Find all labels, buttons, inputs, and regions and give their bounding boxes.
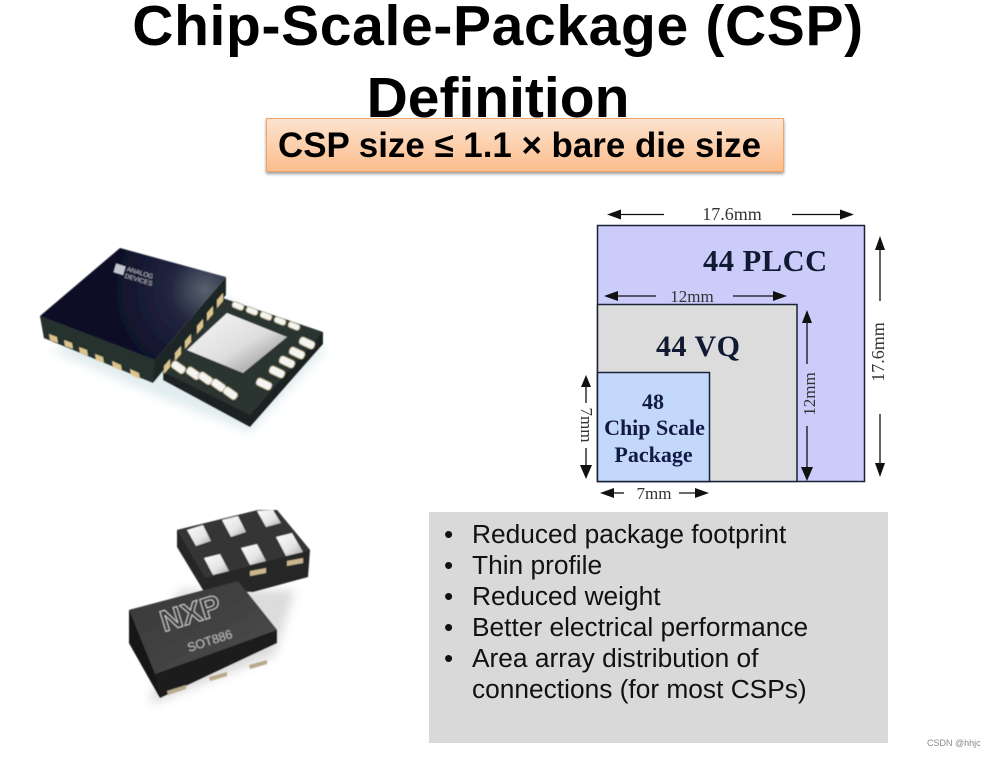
panel: CSP benefits list: Better electrical performance xyxy=(472,612,808,642)
panel: CSP benefits list: Reduced package footprint xyxy=(472,519,786,549)
panel: CSP benefits list xyxy=(429,512,888,743)
callout: CSP size definition: CSP size ≤ 1.1 × bare die size xyxy=(278,126,761,165)
callout: CSP size definition xyxy=(266,118,784,172)
icon: Analog Devices QFN package photo xyxy=(40,248,325,432)
panel: CSP benefits list: • xyxy=(444,612,453,642)
dimension: right 17.6mm: 17.6mm xyxy=(868,322,888,382)
panel: 48 Chip Scale Package: Package xyxy=(614,442,693,467)
panel: 44 PLCC xyxy=(598,226,864,482)
dimension: CSP height 7mm xyxy=(577,375,596,479)
dimension: VQ height 12mm: 12mm xyxy=(800,372,819,416)
lower package with marking: SOT886 xyxy=(186,627,234,655)
title: Definition xyxy=(367,66,629,130)
dimension: CSP width 7mm: 7mm xyxy=(637,484,671,503)
lower package, pad side up xyxy=(163,297,323,427)
panel: 44 VQ: 44 VQ xyxy=(656,330,740,363)
icon: NXP SOT886 package photo xyxy=(129,510,310,705)
panel: CSP benefits list: Thin profile xyxy=(472,550,602,580)
dimension: right 17.6mm xyxy=(868,236,888,477)
title xyxy=(132,0,864,130)
diagram: package size comparison xyxy=(577,204,888,503)
dimension: VQ width 12mm xyxy=(604,287,787,306)
panel: 48 Chip Scale Package: Chip Scale xyxy=(604,415,705,440)
dimension: VQ height 12mm xyxy=(800,310,819,481)
panel: 44 PLCC: 44 PLCC xyxy=(703,244,828,278)
dimension: top 17.6mm: 17.6mm xyxy=(702,204,762,224)
panel: CSP benefits list: • xyxy=(444,643,453,673)
lower package with marking xyxy=(129,581,277,698)
dimension: CSP width 7mm xyxy=(600,484,709,503)
panel: 48 Chip Scale Package: 48 xyxy=(642,389,664,414)
logo text: ANALOG xyxy=(126,266,154,281)
upper package with pads xyxy=(177,510,310,592)
panel: 44 VQ xyxy=(598,304,797,482)
panel: 48 Chip Scale Package xyxy=(598,372,710,482)
NXP marking: NXP xyxy=(156,589,225,639)
panel: CSP benefits list: • xyxy=(444,581,453,611)
panel: CSP benefits list: Reduced weight xyxy=(472,581,661,611)
watermark: CSDN @hhjc xyxy=(927,738,981,748)
dimension: top 17.6mm xyxy=(607,204,854,224)
panel: CSP benefits list: connections (for most CSPs) xyxy=(472,674,807,704)
panel: CSP benefits list: Area array distribution of xyxy=(472,643,758,673)
dimension: VQ width 12mm: 12mm xyxy=(670,287,714,306)
panel: CSP benefits list: • xyxy=(444,550,453,580)
logo text: DEVICES xyxy=(124,273,154,288)
dimension: CSP height 7mm: 7mm xyxy=(577,408,596,442)
upper package xyxy=(40,248,226,383)
logo text xyxy=(112,263,156,288)
panel: CSP benefits list: • xyxy=(444,519,453,549)
